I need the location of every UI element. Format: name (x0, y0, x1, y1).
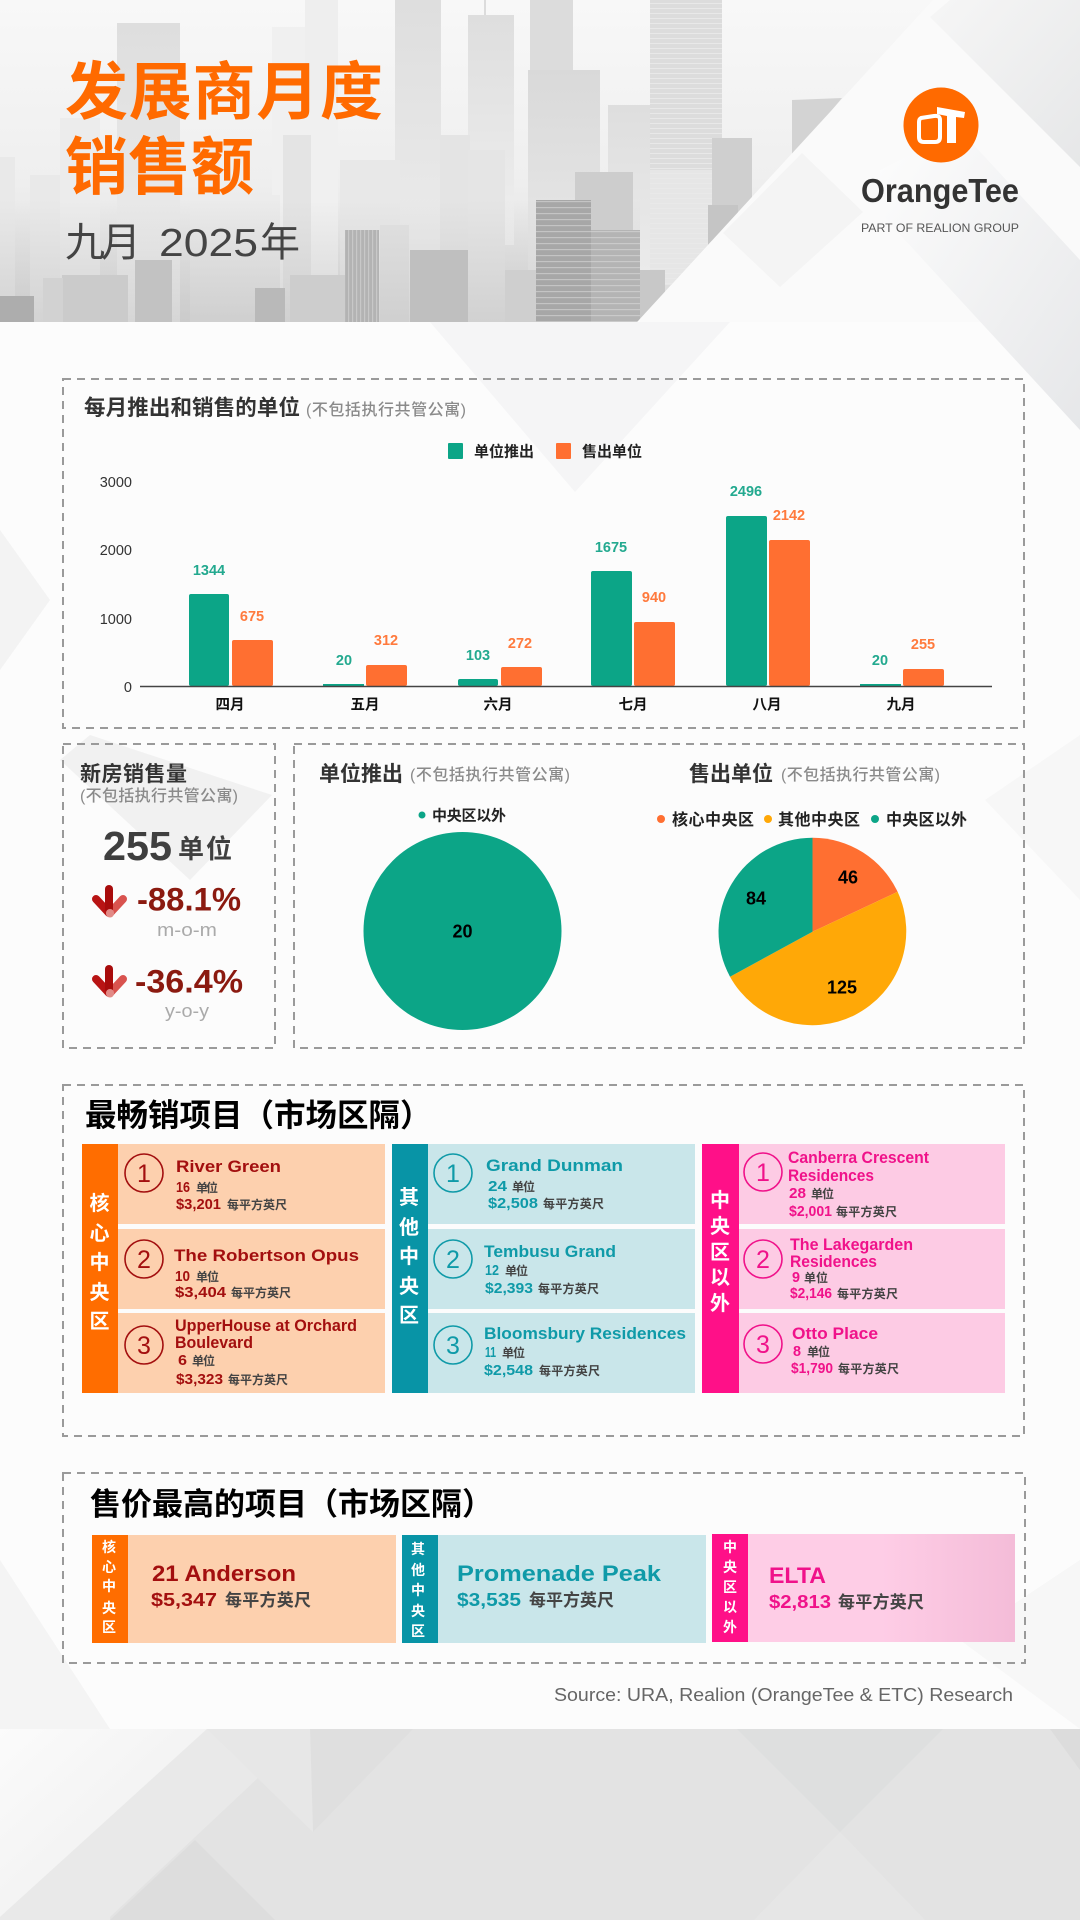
item: River Green: 1 (137, 1160, 151, 1188)
card: rest of central region: 每平方英尺 (529, 1590, 614, 1610)
bar value labels: 255 (911, 637, 935, 653)
bottom band (0, 1729, 1080, 1920)
pie heading: sold units: 售出单位 (689, 762, 773, 786)
item: Otto Place: 8 (793, 1343, 801, 1360)
stat: m-o-m change: m-o-m (157, 920, 217, 940)
card: core central region: 核 (102, 1539, 116, 1555)
column: rest of central region: 区 (399, 1305, 419, 1327)
pie legend: sold: 中央区以外 (886, 810, 967, 829)
bar value labels: 675 (240, 609, 264, 625)
card: outside central region: ELTA (769, 1563, 826, 1588)
item: Tembusu Grand (434, 1240, 616, 1297)
title (65, 58, 383, 203)
item: Grand Dunman: $2,508 (488, 1195, 538, 1212)
card: rest of central region: 中 (411, 1582, 425, 1598)
column: rest of central region: 他 (399, 1216, 419, 1239)
item: The Robertson Opus: The Robertson Opus (174, 1246, 359, 1265)
item: Canberra Crescent Residences: 1 (756, 1159, 770, 1187)
item: River Green: 单位 (196, 1180, 218, 1195)
stat: m-o-m change (137, 882, 241, 940)
item: The Lakegarden Residences: Residences (790, 1252, 877, 1271)
month labels: 七月 (618, 696, 648, 714)
y axis labels: 0 (124, 680, 132, 696)
panel: monthly launches and sales chart (63, 379, 1024, 728)
total units: 单位 (178, 834, 232, 864)
section heading: 最畅销项目（市场区隔） (85, 1097, 432, 1133)
pie heading: launched units: (不包括执行共管公寓) (410, 765, 570, 784)
subtitle: date: 年 (260, 221, 300, 265)
item: The Robertson Opus: 每平方英尺 (231, 1285, 291, 1300)
column: outside central region: 外 (710, 1292, 730, 1315)
bar chart: bars (140, 516, 992, 686)
logo: OrangeTee (861, 88, 1019, 235)
item: The Robertson Opus: 2 (137, 1246, 151, 1274)
icon: down arrow month on month (96, 889, 123, 914)
panel: new home sales (63, 744, 275, 1048)
item: Bloomsbury Residences (434, 1324, 686, 1379)
bar value labels: 2496 (730, 484, 762, 500)
column: outside central region: 以 (710, 1267, 730, 1289)
card: core central region: 每平方英尺 (225, 1590, 311, 1610)
icon: down arrow year on year (96, 969, 123, 994)
card: outside central region: 中 (723, 1539, 737, 1555)
y axis labels (100, 475, 132, 696)
item: Canberra Crescent Residences: 单位 (811, 1186, 834, 1201)
chart legend: 单位推出 (474, 442, 534, 460)
item: Canberra Crescent Residences: 28 (789, 1185, 806, 1202)
bar value labels: 1675 (595, 540, 627, 556)
item: The Lakegarden Residences: 2 (756, 1246, 770, 1274)
panel: pie charts (294, 744, 1024, 1048)
item: The Lakegarden Residences: 单位 (804, 1270, 828, 1285)
item: The Lakegarden Residences (744, 1235, 913, 1302)
column: core central region: 心 (90, 1222, 110, 1245)
pie heading: launched units: 单位推出 (319, 762, 403, 786)
card: rest of central region: 他 (411, 1562, 425, 1578)
item: The Robertson Opus: 10 (175, 1268, 190, 1285)
panel heading: 新房销售量 (80, 762, 187, 786)
column: rest of central region: 其 (399, 1186, 419, 1209)
logo: OrangeTee: PART OF REALION GROUP (861, 221, 1019, 235)
pie chart: launched units: 20 (452, 922, 473, 942)
item: UpperHouse at Orchard Boulevard: 6 (178, 1352, 187, 1369)
item: The Lakegarden Residences: The Lakegarden (790, 1235, 913, 1254)
item: UpperHouse at Orchard Boulevard: UpperHouse at Orchard (175, 1316, 357, 1335)
stat: m-o-m change: -88.1% (137, 882, 241, 918)
source note: Source: URA, Realion (OrangeTee & ETC) Research (554, 1685, 1013, 1705)
item: UpperHouse at Orchard Boulevard: 每平方英尺 (228, 1372, 288, 1387)
total units: 255 (103, 823, 172, 869)
column: outside central region: 央 (710, 1215, 730, 1238)
item: Otto Place: Otto Place (792, 1324, 878, 1343)
chart legend: 售出单位 (582, 442, 642, 460)
item: Bloomsbury Residences: 单位 (502, 1345, 525, 1360)
title: 销售额 (65, 133, 254, 203)
section heading: 售价最高的项目（市场区隔） (90, 1487, 493, 1522)
card: rest of central region: 区 (411, 1623, 425, 1639)
card: rest of central region (402, 1535, 706, 1643)
item: Tembusu Grand: $2,393 (485, 1280, 533, 1297)
pie chart: sold units: 84 (746, 888, 766, 908)
total units (103, 823, 232, 869)
bar value labels: 2142 (773, 508, 805, 524)
item: The Robertson Opus: $3,404 (175, 1284, 227, 1301)
pie chart: sold units (719, 838, 906, 1025)
item: Otto Place: 单位 (807, 1344, 830, 1359)
item: Tembusu Grand: 单位 (505, 1263, 528, 1278)
item: Grand Dunman: 1 (446, 1160, 460, 1188)
bar value labels (193, 484, 935, 669)
pie heading: sold units: (不包括执行共管公寓) (781, 765, 940, 784)
subtitle: date: 2025 (159, 222, 258, 265)
item: River Green: River Green (176, 1157, 281, 1176)
card: core central region: 央 (102, 1600, 116, 1616)
column: core central region (82, 1144, 385, 1393)
column: rest of central region (392, 1144, 695, 1393)
item: Bloomsbury Residences: $2,548 (484, 1362, 533, 1379)
card: outside central region (712, 1534, 1015, 1642)
item: The Lakegarden Residences: $2,146 (790, 1285, 832, 1302)
item: UpperHouse at Orchard Boulevard: 3 (137, 1332, 151, 1360)
item: Grand Dunman (434, 1154, 623, 1212)
month labels: 九月 (886, 696, 916, 714)
subtitle: date (65, 221, 300, 265)
column: outside central region: 区 (710, 1242, 730, 1264)
month labels: 五月 (350, 698, 380, 714)
item: Grand Dunman: 单位 (512, 1179, 535, 1194)
item: Otto Place: 3 (756, 1331, 770, 1359)
pie chart: sold units: 46 (838, 868, 858, 888)
subtitle: date: 九月 (65, 221, 141, 265)
item: River Green: 16 (176, 1179, 190, 1196)
pie legend: sold: 其他中央区 (778, 811, 860, 829)
item: Canberra Crescent Residences: Canberra Crescent (788, 1148, 929, 1167)
card: rest of central region: 央 (411, 1603, 425, 1619)
pie legend: sold (657, 810, 967, 829)
card: core central region: 中 (102, 1578, 116, 1594)
panel: highest priced projects (63, 1473, 1025, 1663)
item: UpperHouse at Orchard Boulevard (125, 1316, 357, 1388)
bar value labels: 103 (466, 648, 490, 664)
bar value labels: 940 (642, 590, 666, 606)
item: River Green: $3,201 (176, 1196, 221, 1213)
panel heading (80, 762, 238, 805)
item: Canberra Crescent Residences: $2,001 (789, 1203, 832, 1220)
card: outside central region: 以 (723, 1599, 737, 1615)
logo: OrangeTee: OrangeTee (861, 172, 1019, 209)
item: Canberra Crescent Residences (744, 1148, 929, 1220)
title: 发展商月度 (65, 58, 383, 128)
y axis labels: 1000 (100, 612, 132, 628)
stat: y-o-y change: -36.4% (135, 964, 243, 1000)
y axis labels: 2000 (100, 543, 132, 559)
item: Tembusu Grand: 2 (446, 1246, 460, 1274)
item: Bloomsbury Residences: 每平方英尺 (539, 1363, 600, 1378)
item: River Green: 每平方英尺 (227, 1197, 287, 1212)
column: rest of central region: 中 (399, 1245, 419, 1268)
chart heading: (不包括执行共管公寓) (306, 400, 466, 419)
column: core central region: 区 (90, 1311, 110, 1333)
bar value labels: 312 (374, 633, 398, 649)
item: Otto Place (744, 1324, 899, 1377)
item: UpperHouse at Orchard Boulevard: Boulevard (175, 1333, 253, 1352)
card: outside central region: 区 (723, 1579, 737, 1595)
stat: y-o-y change (135, 964, 243, 1021)
pie heading: launched units (319, 762, 570, 786)
bar value labels: 1344 (193, 563, 225, 579)
hero skyline image (0, 0, 933, 322)
chart legend (448, 442, 642, 460)
column: rest of central region: 央 (399, 1275, 419, 1298)
card: core central region: $5,347 (151, 1590, 217, 1610)
item: The Robertson Opus (125, 1240, 359, 1301)
item: Otto Place: 每平方英尺 (838, 1361, 899, 1376)
column: outside central region (702, 1144, 1005, 1393)
card: core central region: 心 (102, 1559, 116, 1575)
card: core central region: 21 Anderson (152, 1561, 296, 1586)
month labels: 四月 (216, 698, 244, 714)
card: rest of central region: 其 (411, 1541, 425, 1557)
item: Bloomsbury Residences: 3 (446, 1332, 460, 1360)
item: The Robertson Opus: 单位 (196, 1269, 219, 1284)
item: Tembusu Grand: 12 (485, 1262, 499, 1279)
card: outside central region: 每平方英尺 (838, 1592, 924, 1612)
panel heading: (不包括执行共管公寓) (80, 786, 238, 805)
pie chart: sold units: 125 (827, 978, 857, 998)
panel: best selling projects (63, 1085, 1024, 1436)
item: Bloomsbury Residences: Bloomsbury Residences (484, 1324, 686, 1343)
card: outside central region: 央 (723, 1559, 737, 1575)
month labels: 六月 (484, 696, 512, 714)
item: Grand Dunman: 24 (488, 1178, 508, 1195)
column: core central region: 中 (90, 1251, 110, 1274)
card: core central region (92, 1535, 396, 1643)
pie legend: sold: 核心中央区 (672, 810, 754, 829)
column: outside central region: 中 (710, 1189, 730, 1212)
item: Canberra Crescent Residences: 每平方英尺 (836, 1204, 897, 1219)
item: River Green (125, 1154, 287, 1213)
item: Tembusu Grand: 每平方英尺 (538, 1281, 599, 1296)
column: core central region: 央 (90, 1281, 110, 1304)
bar value labels: 272 (508, 636, 532, 652)
stat: y-o-y change: y-o-y (165, 1001, 209, 1021)
column: core central region: 核 (90, 1191, 110, 1215)
item: Tembusu Grand: Tembusu Grand (484, 1242, 616, 1261)
bar value labels: 20 (336, 653, 352, 669)
item: Grand Dunman: 每平方英尺 (543, 1196, 604, 1211)
item: Bloomsbury Residences: 11 (485, 1344, 496, 1361)
card: core central region: 区 (102, 1619, 116, 1635)
item: UpperHouse at Orchard Boulevard: 单位 (192, 1353, 215, 1368)
card: outside central region: $2,813 (769, 1592, 831, 1612)
item: Grand Dunman: Grand Dunman (486, 1156, 623, 1175)
item: UpperHouse at Orchard Boulevard: $3,323 (176, 1371, 223, 1388)
chart heading: 每月推出和销售的单位 (84, 395, 300, 420)
card: outside central region: 外 (723, 1619, 737, 1635)
item: The Lakegarden Residences: 9 (792, 1269, 800, 1286)
card: rest of central region: $3,535 (457, 1590, 521, 1610)
month labels: 八月 (752, 698, 782, 714)
y axis labels: 3000 (100, 475, 132, 491)
pie legend: launched: 中央区以外 (432, 806, 506, 824)
item: Canberra Crescent Residences: Residences (788, 1166, 874, 1185)
item: Otto Place: $1,790 (791, 1360, 833, 1377)
item: The Lakegarden Residences: 每平方英尺 (837, 1286, 898, 1301)
pie heading: sold units (689, 762, 940, 786)
card: rest of central region: Promenade Peak (457, 1561, 662, 1586)
bar value labels: 20 (872, 653, 888, 669)
month labels (216, 696, 916, 714)
pie chart: launched units (364, 832, 562, 1030)
chart heading (84, 395, 466, 420)
